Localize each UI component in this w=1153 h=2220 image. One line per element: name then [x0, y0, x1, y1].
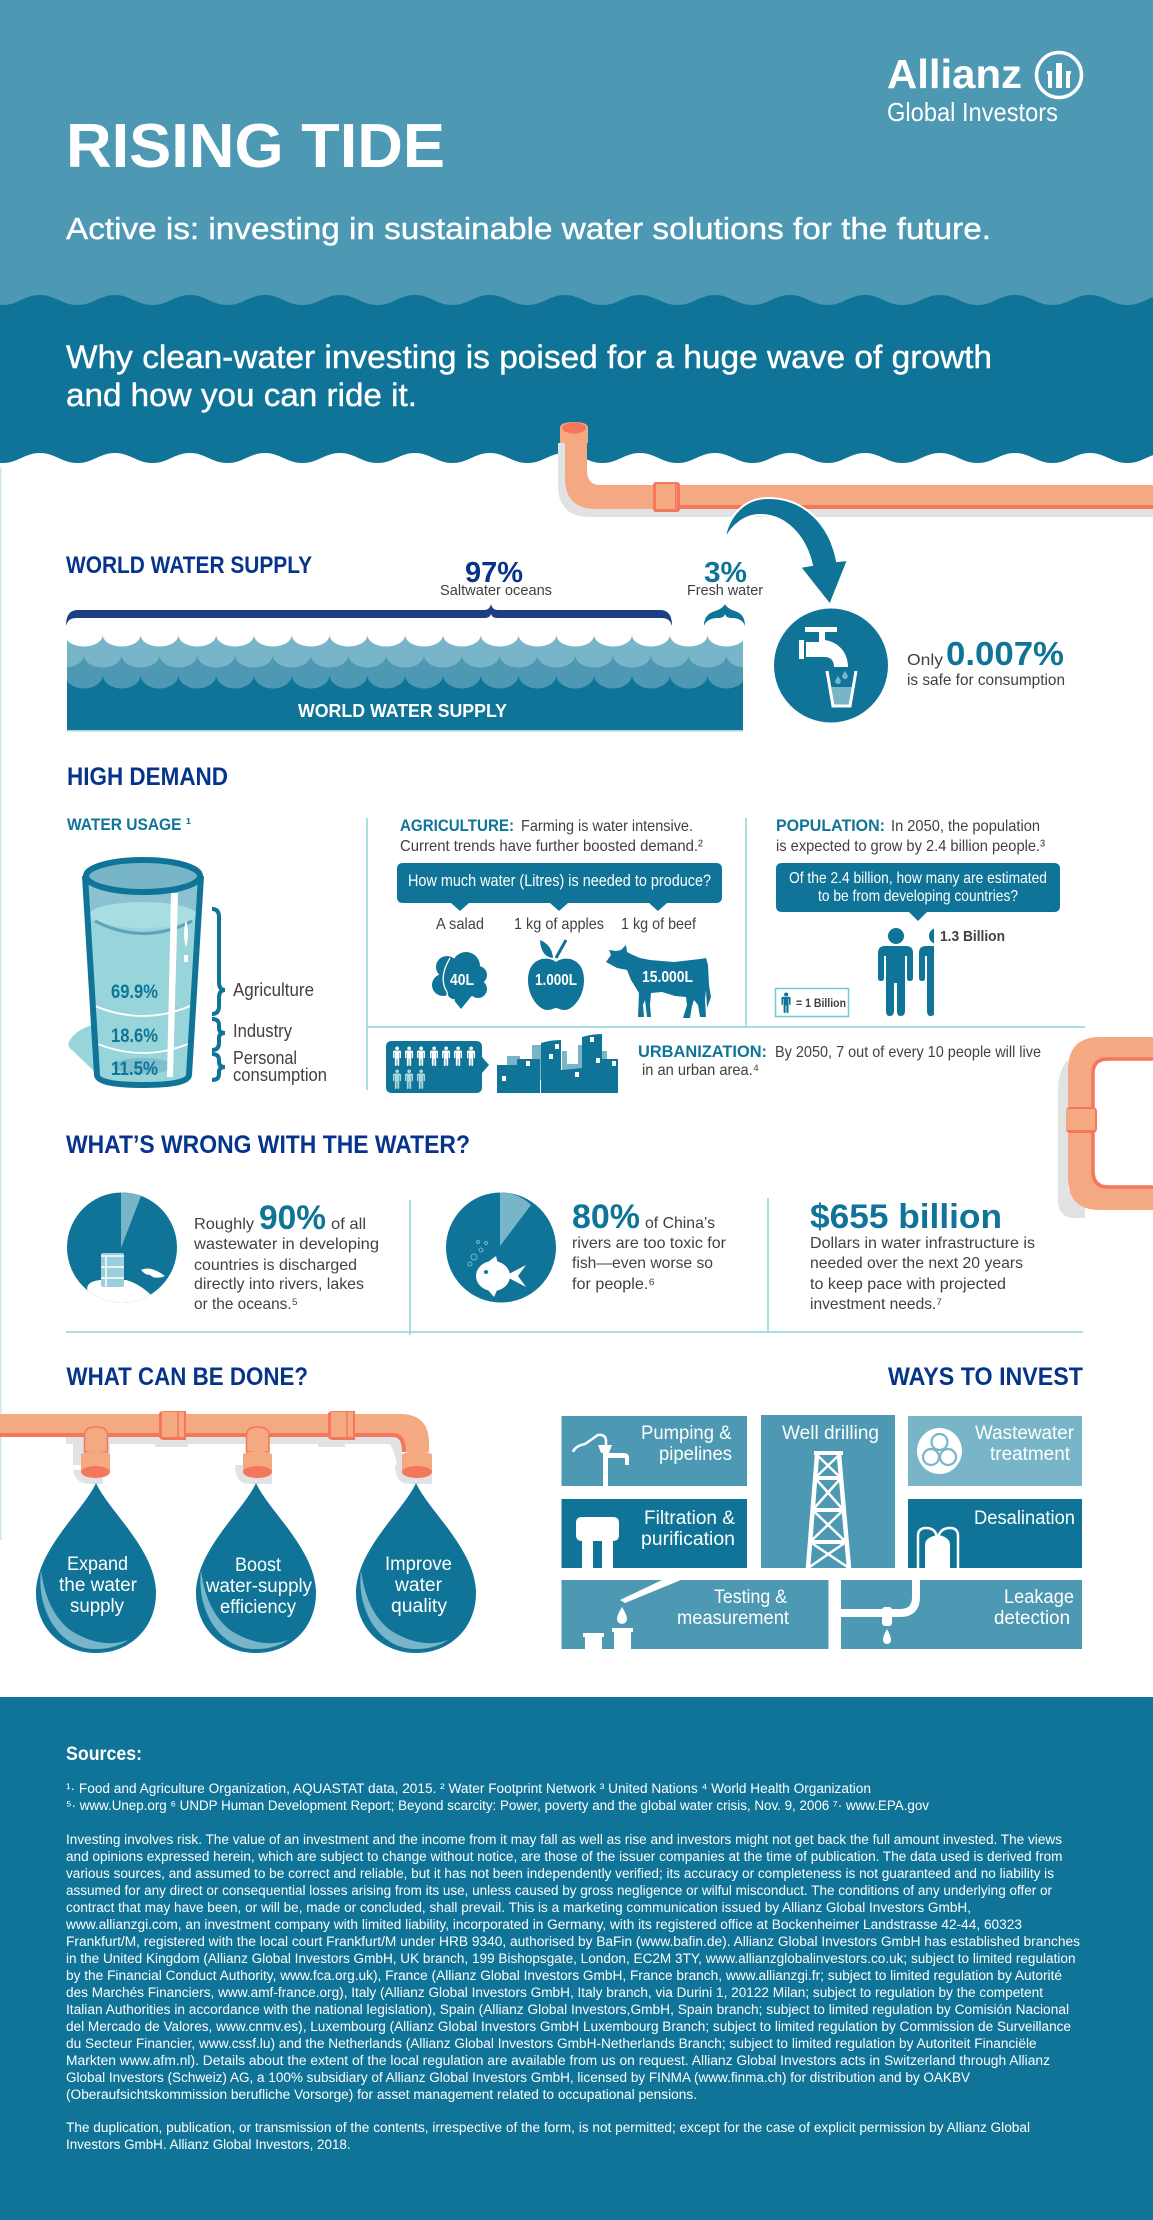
drop: improve water quality: quality: [391, 1596, 448, 1617]
icon: apple 1.000L: 1.000L: [535, 972, 577, 989]
tile: pumping and pipelines: pipelines: [659, 1444, 732, 1465]
labels: water use: consumption: [233, 1065, 327, 1085]
panel: what can be done: [0, 1363, 476, 1653]
stat: $655 billion: to keep pace with projected: [810, 1276, 1006, 1293]
header panel: [0, 0, 1153, 468]
tile: wastewater treatment: treatment: [990, 1444, 1071, 1465]
tile: well drilling: [761, 1415, 895, 1568]
stat: 80% China's rivers: rivers are too toxic for: [572, 1235, 727, 1252]
disclaimer: du Secteur Financier, www.cssf.lu) and the Netherlands (Allianz Global Investors GmbH-Netherlands Branch; subject to limited regulation by Autoriteit Financiële: [66, 2036, 1037, 2051]
brace: fresh water: [704, 604, 745, 626]
tile: wastewater treatment: [908, 1416, 1082, 1486]
disclaimer: www.allianzgi.com, an investment company with limited liability, incorporated in Germany, with its registered office at Bockenheimer Landstrasse 42-44, 60323: [65, 1917, 1022, 1932]
icon: cow 15.000L: 15.000L: [642, 969, 693, 986]
stat: 90% wastewater: wastewater in developing: [193, 1236, 379, 1253]
tile: desalination: Desalination: [974, 1508, 1075, 1529]
heading: WORLD WATER SUPPLY: [66, 552, 312, 579]
block: agriculture: 1 kg of apples: [514, 916, 604, 933]
icon: salad 40L: [432, 952, 487, 1009]
tile: wastewater treatment: Wastewater: [975, 1423, 1075, 1444]
copyright note: [66, 2120, 1030, 2152]
tile: leakage detection: Leakage: [1004, 1587, 1074, 1608]
disclaimer: Markten www.afm.nl). Details about the extent of the local regulation are available from us on request. Allianz Global Investors acts in Switzerland through Allianz: [66, 2053, 1050, 2068]
stat: 0.007%: 0.007%: [946, 635, 1064, 672]
tile: testing and measurement: [562, 1580, 828, 1649]
callout: how much water: How much water (Litres) is needed to produce?: [408, 872, 711, 890]
stat: 0.007%: Only: [907, 652, 943, 669]
panel: sources footer: [0, 1697, 1153, 2220]
title: RISING TIDE: [66, 112, 445, 181]
block: urbanization: in an urban area.⁴: [642, 1062, 759, 1079]
drop: boost water-supply efficiency: Boost: [235, 1555, 282, 1576]
stat: 80% China's rivers: for people.⁶: [572, 1276, 655, 1293]
icon: salad 40L: 40L: [450, 972, 474, 989]
chart: water glass: 69.9%: [111, 982, 158, 1003]
drop: boost water-supply efficiency: water-supply: [205, 1576, 312, 1597]
stat: 90% wastewater: or the oceans.⁵: [194, 1296, 298, 1313]
tile: leakage detection: [841, 1578, 1082, 1649]
labels: water use: Personal: [233, 1048, 297, 1068]
stat: 90% wastewater: directly into rivers, lakes: [194, 1276, 364, 1293]
callout: developing countries: Of the 2.4 billion, how many are estimated: [789, 870, 1047, 887]
subheading: water usage: WATER USAGE ¹: [67, 815, 191, 834]
disclaimer: and opinions expressed herein, which are subject to change without notice, are those of the issuer companies at the time of publication. The data used is derived from: [66, 1849, 1062, 1864]
stat: 80% China's rivers: [572, 1198, 727, 1293]
drop: expand the water supply: [36, 1483, 156, 1653]
callout: how much water: [397, 863, 722, 911]
disclaimer: various sources, and assumed to be correct and reliable, but it has not been independently verified; its accuracy or completeness is not guaranteed and no liability is: [66, 1866, 1054, 1881]
water layers: WORLD WATER SUPPLY: [298, 701, 507, 721]
stat: $655 billion: Dollars in water infrastructure is: [810, 1235, 1035, 1252]
tile: leakage detection: detection: [994, 1608, 1070, 1629]
callout: developing countries: [776, 863, 1060, 921]
stat: 3% fresh water: [687, 557, 763, 599]
chart: 90% pie with barrel: [67, 1192, 177, 1306]
label: 1.3 billion: 1.3 Billion: [940, 928, 1005, 945]
disclaimer: (Oberaufsichtskommission berufliche Vorsorge) for asset management related to occupational pensions.: [66, 2087, 697, 2102]
chart: water glass: [68, 860, 201, 1085]
icon: cow 15.000L: [606, 945, 711, 1018]
stat: $655 billion: investment needs.⁷: [810, 1296, 942, 1313]
subtitle: Active is: investing in sustainable water solutions for the future.: [66, 211, 991, 246]
heading: WHAT CAN BE DONE?: [66, 1363, 308, 1391]
panel: high demand: [67, 763, 1085, 1093]
tile: filtration and purification: purification: [641, 1529, 735, 1550]
tile: pumping and pipelines: [562, 1416, 747, 1486]
legend: 1 billion: = 1 Billion: [796, 996, 846, 1010]
block: population: is expected to grow by 2.4 billion people.³: [776, 838, 1046, 855]
logo: Allianz Global Investors: [887, 51, 1082, 127]
block: agriculture: [397, 816, 722, 1018]
drop: expand the water supply: supply: [70, 1596, 124, 1617]
copyright note: Investors GmbH. Allianz Global Investors, 2018.: [66, 2137, 351, 2152]
braces: [212, 909, 225, 1080]
tile: filtration and purification: Filtration &: [644, 1508, 735, 1529]
block: agriculture: 1 kg of beef: [621, 916, 696, 933]
tile: filtration and purification: [562, 1499, 747, 1568]
disclaimer: assumed for any direct or consequential losses arising from its use, unless caused by gross negligence or wilful misconduct. The conditions of any underlying offer or: [66, 1883, 1053, 1898]
tile: well drilling: Well drilling: [782, 1423, 879, 1444]
logo: Allianz Global Investors: Allianz: [887, 51, 1022, 97]
tile: desalination: [908, 1499, 1082, 1568]
stat: 90% wastewater: Roughly: [194, 1216, 254, 1233]
pipe: top: [558, 422, 1153, 517]
water layers: [67, 635, 743, 732]
disclaimer: Frankfurt/M, registered with the local court Frankfurt/M under HRB 9340, authorised by BaFin (www.bafin.de). Allianz Global Investors GmbH has established branches: [66, 1934, 1080, 1949]
block: population: POPULATION:: [776, 816, 885, 835]
intro text: Why clean-water investing is poised for a huge wave of growth: [66, 339, 992, 375]
heading: WAYS TO INVEST: [888, 1363, 1083, 1391]
disclaimer: [65, 1832, 1080, 2102]
logo: Allianz Global Investors: Global Investors: [887, 97, 1058, 127]
intro text: and how you can ride it.: [66, 377, 417, 413]
drop: boost water-supply efficiency: efficiency: [220, 1597, 296, 1618]
labels: water use: Industry: [233, 1021, 292, 1041]
stat: 3% fresh water: 3%: [704, 557, 747, 589]
icon: city: [497, 1034, 618, 1093]
labels: water use: Agriculture: [233, 980, 314, 1000]
panel: ways to invest: [562, 1363, 1083, 1649]
drop: expand the water supply: Expand: [67, 1554, 128, 1575]
block: urbanization: [386, 1034, 1041, 1093]
heading: HIGH DEMAND: [67, 763, 228, 791]
panel: what's wrong with the water: [66, 1131, 1083, 1335]
source list: ⁵· www.Unep.org ⁶ UNDP Human Development Report; Beyond scarcity: Power, poverty and the global water crisis, Nov. 9, 2006 ⁷· www.EPA.gov: [66, 1798, 929, 1813]
stat: 3% fresh water: Fresh water: [687, 582, 763, 599]
stat: 97% saltwater: 97%: [465, 557, 523, 589]
icon: people tag: [386, 1041, 489, 1093]
stat: $655 billion: $655 billion: [810, 1198, 1002, 1236]
edge line: [0, 462, 2, 1540]
panel: world water supply: [66, 552, 1065, 732]
disclaimer: in the United Kingdom (Allianz Global Investors GmbH, UK branch, 199 Bishopsgate, London, EC2M 3TY, www.allianzglobalinvestors.co.uk; subject to limited regulation: [66, 1951, 1076, 1966]
intro text: [66, 339, 992, 413]
source list: [66, 1781, 929, 1813]
stat: 80% China's rivers: 80%: [572, 1198, 640, 1236]
stat: 97% saltwater: Saltwater oceans: [440, 582, 552, 599]
drop: improve water quality: Improve: [385, 1554, 452, 1575]
labels: water use: [233, 980, 327, 1085]
legend: 1 billion: [776, 988, 848, 1016]
block: agriculture: Farming is water intensive.: [521, 818, 693, 835]
stat: 90% wastewater: 90%: [259, 1199, 326, 1237]
disclaimer: del Mercado de Valores, www.cnmv.es), Luxembourg (Allianz Global Investors GmbH Luxembourg Branch; subject to limited regulation by Commission de Surveillance: [66, 2019, 1071, 2034]
block: population: In 2050, the population: [891, 818, 1040, 835]
block: agriculture: A salad: [436, 916, 484, 933]
chart: water glass: 11.5%: [111, 1059, 158, 1080]
stat: 80% China's rivers: fish—even worse so: [572, 1255, 713, 1272]
icon: faucet and glass: [774, 608, 888, 722]
heading: sources: Sources:: [66, 1744, 142, 1765]
drop: improve water quality: [356, 1483, 476, 1653]
disclaimer: Global Investors (Schweiz) AG, a 100% subsidiary of Allianz Global Investors GmbH, licensed by FINMA (www.finma.ch) for distribution and by OAKBV: [66, 2070, 970, 2085]
block: urbanization: URBANIZATION:: [638, 1042, 767, 1061]
arrow: [724, 498, 848, 605]
stat: $655 billion: needed over the next 20 years: [810, 1255, 1023, 1272]
pipe with three nozzles: [0, 1411, 432, 1484]
source list: ¹· Food and Agriculture Organization, AQUASTAT data, 2015. ² Water Footprint Network ³ United Nations ⁴ World Health Organization: [66, 1781, 871, 1796]
disclaimer: Investing involves risk. The value of an investment and the income from it may fall as well as rise and investors might not get back the full amount invested. The views: [66, 1832, 1062, 1847]
stat: 0.007%: is safe for consumption: [907, 672, 1065, 689]
copyright note: The duplication, publication, or transmission of the contents, irrespective of the form, is not permitted; except for the case of explicit permission by Allianz Global: [66, 2120, 1030, 2135]
callout: developing countries: to be from developing countries?: [818, 888, 1018, 905]
stat: 90% wastewater: countries is discharged: [194, 1257, 357, 1274]
stat: 80% China's rivers: of China’s: [645, 1215, 715, 1232]
disclaimer: des Marchés Financiers, www.amf-france.org), Italy (Allianz Global Investors GmbH, Italy branch, via Durini 1, 20122 Milan; subject to regulation by the competent: [66, 1985, 1043, 2000]
stat: 97% saltwater: [440, 557, 552, 599]
heading: WHAT’S WRONG WITH THE WATER?: [66, 1131, 470, 1159]
drop: boost water-supply efficiency: [196, 1483, 316, 1653]
stat: 90% wastewater: of all: [331, 1216, 366, 1233]
disclaimer: contract that may have been, or will be, made or concluded, shall prevail. This is a marketing communication issued by Allianz Global Investors GmbH,: [66, 1900, 971, 1915]
icon: apple 1.000L: [528, 940, 584, 1010]
chart: 80% pie with fish: [446, 1192, 556, 1302]
drop: expand the water supply: the water: [59, 1575, 138, 1596]
block: agriculture: Current trends have further boosted demand.²: [400, 838, 704, 855]
disclaimer: by the Financial Conduct Authority, www.fca.org.uk), France (Allianz Global Investors GmbH, France branch, www.allianzgi.fr; subject to limited regulation by Autorité: [66, 1968, 1062, 1983]
chart: water glass: 18.6%: [111, 1026, 158, 1047]
pipe: right side: [1058, 1037, 1153, 1218]
brace: saltwater: [66, 604, 672, 626]
block: population: [776, 816, 1060, 1016]
block: urbanization: By 2050, 7 out of every 10 people will live: [775, 1044, 1041, 1061]
block: agriculture: AGRICULTURE:: [400, 816, 514, 835]
stat: $655 billion: [810, 1198, 1035, 1313]
tile: testing and measurement: Testing &: [714, 1587, 787, 1608]
tile: pumping and pipelines: Pumping &: [641, 1423, 732, 1444]
drop: improve water quality: water: [394, 1575, 443, 1596]
disclaimer: Italian Authorities in accordance with the national legislation), Spain (Allianz Global Investors,GmbH, Spain branch; subject to limited regulation by Comisión Nacional: [66, 2002, 1069, 2017]
tile: testing and measurement: measurement: [677, 1608, 790, 1629]
pictogram: 1.3 billion people: [878, 928, 934, 1016]
stat: 0.007%: [907, 635, 1065, 689]
stat: 90% wastewater: [193, 1199, 379, 1313]
